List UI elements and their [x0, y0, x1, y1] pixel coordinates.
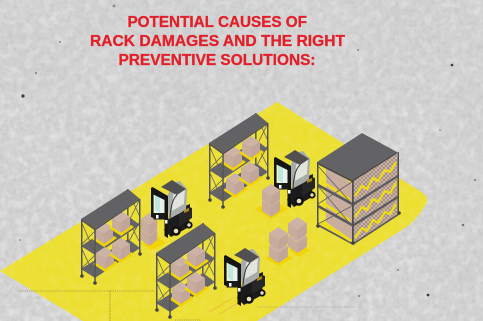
rack: top centre: [208, 113, 270, 209]
title: PREVENTIVE SOLUTIONS:: [118, 52, 316, 69]
title: [90, 14, 346, 69]
floor markings: dotted lines: [18, 291, 355, 321]
forklift: upper right: [274, 150, 316, 208]
title: RACK DAMAGES AND THE RIGHT: [90, 33, 346, 50]
forklift forks: bottom: [209, 299, 238, 315]
pallet stacks in centre: [265, 217, 310, 266]
large rack with stored goods: [316, 133, 401, 245]
rack: bottom centre: [155, 223, 217, 319]
pallet stack beside upper forklift: [255, 184, 288, 219]
forklift: left: [151, 180, 193, 238]
rack: left: [80, 189, 142, 285]
yellow floor zone: [0, 102, 427, 321]
title: POTENTIAL CAUSES OF: [128, 14, 307, 31]
pallet stack beside left forklift: [141, 213, 166, 250]
forklift: bottom: [224, 248, 266, 306]
